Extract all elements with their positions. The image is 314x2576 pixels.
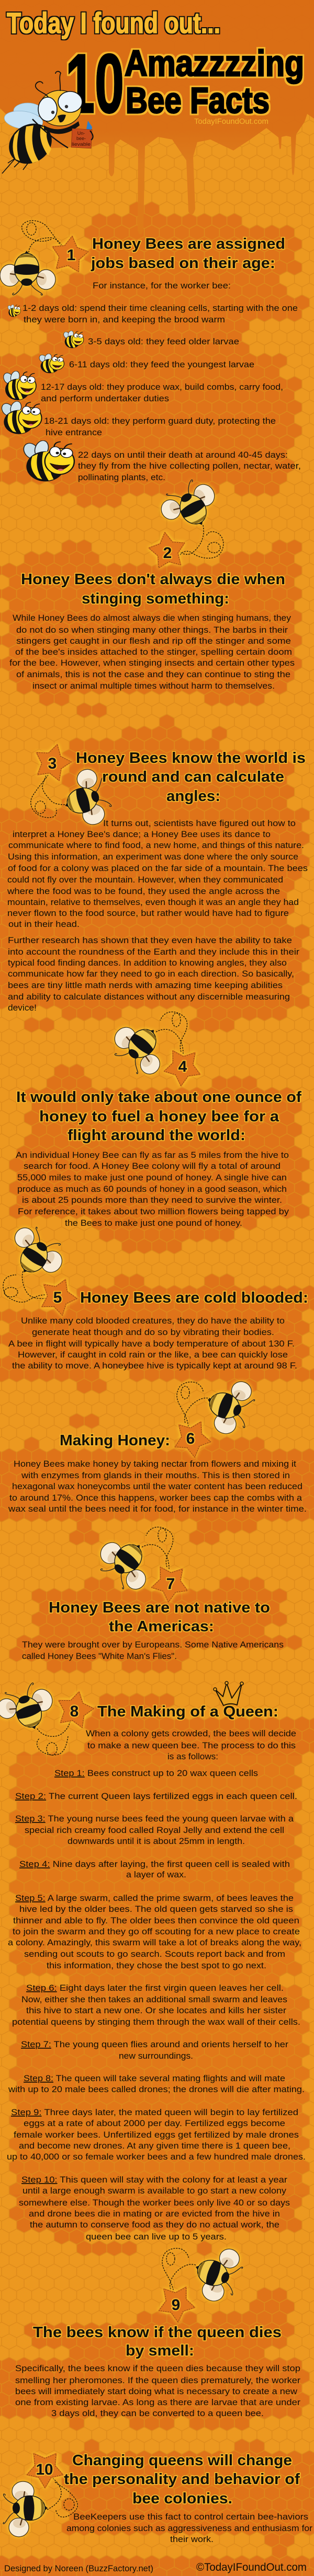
step 10: until a large enough swarm is available to go start a new colony bbox=[23, 2186, 287, 2196]
text block: fact 3 research: communicate how far they need to go in each direction. So basically, bbox=[8, 969, 294, 979]
step 8 bbox=[8, 2073, 305, 2094]
icon: star number 1 bbox=[50, 234, 90, 273]
panel: fact 1 assigned jobs bbox=[0, 221, 301, 482]
text block: fact 6: to around 17%. Once this happens, worker bees cap the combs with a bbox=[9, 1493, 302, 1503]
step 7 bbox=[21, 2039, 288, 2061]
step 5: thinner and able to fly. The older bees then convince the old queen bbox=[13, 1916, 299, 1925]
title: Today I found out: Today I found out... bbox=[7, 6, 220, 39]
panel: fact 8 making of a queen bbox=[0, 1678, 306, 2242]
icon: star number 8 bbox=[58, 1691, 95, 1730]
heading: fact 4: honey to fuel a honey bee for a bbox=[39, 1108, 279, 1125]
text block: fact 8 intro: is as follows: bbox=[167, 1751, 218, 1761]
icon: crown bbox=[214, 1681, 243, 1705]
step 7: new surroundings. bbox=[119, 2051, 193, 2061]
text block: fact 9: 3 days old, they can be converted to a queen bee. bbox=[51, 2408, 264, 2418]
step 10 bbox=[19, 2175, 290, 2242]
text block: fact 4 bbox=[16, 1150, 289, 1228]
text block: fact 9: one from existing larvae. As long as there are larvae that are under bbox=[15, 2397, 300, 2407]
text block: fact 3 dance: mountain, relative to themselves, even though it was an angle they had bbox=[7, 897, 299, 907]
heading: fact 7: Honey Bees are not native to bbox=[49, 1599, 270, 1616]
heading: fact 9: The bees know if the queen dies bbox=[33, 2324, 282, 2341]
heading: fact 10: bee colonies. bbox=[132, 2490, 232, 2507]
text block: fact 9: smelling her pheromones. If the queen dies prematurely, the worker bbox=[15, 2375, 300, 2385]
heading: fact 3: Honey Bees know the world is bbox=[76, 750, 306, 767]
text block: fact 7: called Honey Bees "White Man's Flies". bbox=[22, 1651, 177, 1661]
icon: star number 10: 10 bbox=[36, 2461, 53, 2478]
text block: fact 5: However, if caught in cold rain or the like, a bee can quickly lose bbox=[18, 1350, 288, 1360]
text block: fact 2: of animals, this is not the case and they can continue to sting the bbox=[16, 669, 290, 679]
text block: fact 8 intro: to make a new queen bee. The process to do this bbox=[87, 1740, 296, 1750]
text block: fact 2: do not do so when stinging many other things. The barbs in their bbox=[16, 625, 288, 635]
icon: star number 4: 4 bbox=[178, 1058, 187, 1075]
text: 6-11 days: 6-11 days old: they feed the youngest larvae bbox=[69, 359, 254, 369]
text block: fact 2: stingers get caught in our flesh and rip off the stinger and some bbox=[16, 636, 291, 646]
step 4 bbox=[19, 1859, 290, 1879]
text: 22 days on bbox=[78, 450, 301, 482]
step 4: a layer of wax. bbox=[126, 1870, 186, 1879]
icon: star number 2: 2 bbox=[163, 544, 172, 562]
footer copyright: ©TodayIFoundOut.com bbox=[196, 2561, 307, 2573]
text: 22 days on: 22 days on until their death at around 40-45 days: bbox=[78, 450, 288, 460]
step 5: hive led by the older bees. The old queen gets starved so she is bbox=[19, 1904, 293, 1914]
step 6 bbox=[12, 1983, 300, 2027]
icon: star number 9: 9 bbox=[172, 2296, 180, 2314]
text: for the worker bee: For instance, for the worker bee: bbox=[93, 281, 231, 291]
step 10: the autumn to conserve food as they do no actual work, the bbox=[30, 2220, 279, 2230]
step 6: this hive to start a new one. Or she locates and kills her sister bbox=[26, 2005, 286, 2015]
panel: fact 7 not native bbox=[22, 1527, 284, 1661]
text: 18-21 days bbox=[44, 416, 276, 437]
icon: star number 9 bbox=[157, 2287, 196, 2324]
text block: fact 10 bbox=[66, 2512, 312, 2544]
panel: fact 10 changing queens bbox=[3, 2452, 312, 2544]
step 10: Step 10: This queen will stay with the colony for at least a year bbox=[21, 2175, 287, 2185]
step 9: and become new drones. At any given time there is 1 queen bee, bbox=[19, 2141, 290, 2151]
heading: fact 6: Making Honey: bbox=[60, 1432, 170, 1449]
heading: fact 5: Honey Bees are cold blooded: bbox=[80, 1290, 308, 1306]
step 9 bbox=[7, 2107, 306, 2162]
text block: fact 5 bbox=[8, 1316, 297, 1371]
panel: fact 3 round world and angles bbox=[7, 740, 308, 1013]
text block: fact 3 research: into account the roundness of the Earth and they include this in their bbox=[8, 947, 299, 957]
footer credit: Designed by Noreen (BuzzFactory.net) bbox=[4, 2563, 153, 2573]
text block: fact 3 dance: never flown to the food source, but rather would have had to figure bbox=[7, 908, 289, 918]
heading: fact 2: Honey Bees don't always die when bbox=[21, 571, 285, 588]
icon: star number 5: 5 bbox=[53, 1289, 62, 1306]
icon: bee 18-21 days bbox=[0, 401, 42, 434]
text block: fact 10: among colonies such as aggressiveness and enthusiasm for bbox=[66, 2523, 312, 2533]
text block: fact 4: produce as much as 60 pounds of honey in a good season, which bbox=[17, 1184, 287, 1194]
text block: fact 6: with enzymes from glands in their mouths. This is then stored in bbox=[21, 1470, 290, 1480]
text block: fact 10: their work. bbox=[170, 2534, 214, 2544]
step 6: potential queens by stinging them through the wax wall of their cells. bbox=[12, 2017, 300, 2027]
panel: fact 9 smell bbox=[15, 2240, 300, 2418]
text block: fact 3 research: bees are tiny little math nerds with amazing time keeping abilities bbox=[8, 980, 283, 990]
icon: bee 12-17 days bbox=[2, 370, 36, 400]
heading: fact 9 bbox=[33, 2324, 282, 2359]
text block: fact 3 research: device! bbox=[8, 1003, 37, 1013]
text block: fact 3 dance: interpret a Honey Bee's dance; a Honey Bee uses its dance to bbox=[13, 829, 271, 839]
step 9: eggs at a rate of about 2000 per day. Fertilized eggs become bbox=[24, 2118, 285, 2128]
icon: star number 2 bbox=[147, 530, 187, 569]
heading: fact 8: The Making of a Queen: bbox=[97, 1703, 278, 1720]
panel: fact 4 ounce of honey bbox=[16, 1012, 301, 1228]
icon: bee 8 with trail bbox=[0, 1678, 70, 1755]
text block: fact 3 research: and ability to calculate distances without any discernible measuring bbox=[8, 992, 290, 1002]
step 5: a colony. Amazingly, this swarm will take a lot of breaks along the way, bbox=[8, 1937, 301, 1947]
text block: fact 8 intro: When a colony gets crowded, the bees will decide bbox=[86, 1728, 296, 1738]
text block: fact 5: the ability to move. A honeybee hive is typically kept at around 98 F. bbox=[12, 1361, 297, 1371]
step 9: Step 9: Three days later, the mated queen will begin to lay fertilized bbox=[11, 2107, 298, 2117]
text: 18-21 days: 18-21 days old: they perform guard duty, protecting the bbox=[44, 416, 276, 426]
text block: fact 3 dance: where the food was to be found, they used the angle across the bbox=[7, 886, 280, 896]
icon: star number 7: 7 bbox=[166, 1575, 175, 1593]
step 5: this information, they chose the best spot to go next. bbox=[47, 1960, 266, 1970]
text block: fact 6: Honey Bees make honey by taking nectar from flowers and mixing it bbox=[14, 1459, 296, 1469]
text block: fact 5: A bee in flight will typically have a body temperature of about 130 F. bbox=[8, 1339, 295, 1349]
step 9: female worker bees. Unfertilized eggs get fertilized by male drones bbox=[14, 2130, 299, 2140]
text block: fact 6: wax seal until the bees need it for food, for instance in the winter time. bbox=[8, 1504, 307, 1514]
text block: fact 2: While Honey Bees do almost always die when stinging humans, they bbox=[13, 613, 291, 623]
step 5: to join the swarm and they go off scouting for a new place to create bbox=[13, 1927, 300, 1936]
text block: fact 3 dance bbox=[7, 818, 308, 929]
heading: fact 7 bbox=[49, 1599, 270, 1635]
text: 1-2 days: 1-2 days old: spend their time cleaning cells, starting with the one bbox=[23, 303, 298, 313]
text: 12-17 days: and perform undertaker duties bbox=[41, 393, 169, 403]
text block: fact 2: of the bee's insides attached to the stinger, spelling certain doom bbox=[15, 647, 292, 657]
icon: bee 7 with trail bbox=[91, 1527, 173, 1597]
icon: bee 6 with trail bbox=[177, 1373, 260, 1440]
text block: fact 3 dance: Using this information, an experiment was done where the only source bbox=[8, 852, 298, 862]
icon: bee 1 with trail bbox=[0, 221, 63, 295]
text block: fact 3 dance: could not fly over the mountain. However, when they communicated bbox=[7, 875, 283, 885]
heading: fact 7: the Americas: bbox=[109, 1618, 214, 1635]
icon: bee 9 with trail bbox=[162, 2240, 248, 2307]
heading: fact 1: jobs based on their age: bbox=[91, 255, 275, 272]
text block: fact 4: For reference, it takes about two million flowers being tapped by bbox=[18, 1206, 289, 1216]
text block: fact 5: generate heat though and do so by vibrating their bodies. bbox=[32, 1327, 274, 1337]
icon: bee 4 with trail bbox=[105, 1012, 187, 1082]
step 3 bbox=[15, 1814, 294, 1846]
icon: bee 3 with trail bbox=[31, 765, 116, 831]
text: 22 days on: pollinating plants, etc. bbox=[78, 472, 165, 482]
text block: fact 3 research bbox=[8, 935, 299, 1013]
icon: header bee reading book: bee- bbox=[76, 136, 86, 141]
text block: fact 2: for the bee. However, when stinging insects and certain other types bbox=[9, 658, 295, 668]
title: 10 Amazzzzing Bee Facts: Bee Facts bbox=[126, 80, 270, 121]
text block: fact 3 dance: communicate where to find food, a new home, and things of this nature. bbox=[8, 840, 304, 850]
step 5: sending out scouts to go search. Scouts report back and from bbox=[24, 1949, 285, 1959]
icon: star number 3 bbox=[31, 740, 74, 782]
icon: header bee reading book: lievable bbox=[72, 142, 91, 147]
text block: fact 8 intro bbox=[86, 1728, 296, 1761]
text block: fact 4: 55,000 miles to make just one pound of honey. A single hive can bbox=[17, 1173, 287, 1182]
step 5 bbox=[8, 1893, 301, 1970]
step 2: Step 2: The current Queen lays fertilized eggs in each queen cell. bbox=[15, 1791, 297, 1801]
step 5: Step 5: A large swarm, called the prime swarm, of bees leaves the bbox=[15, 1893, 294, 1903]
heading: fact 3 bbox=[76, 750, 306, 805]
heading: fact 10 bbox=[64, 2452, 300, 2507]
heading: fact 2 bbox=[21, 571, 285, 607]
icon: star number 7 bbox=[151, 1567, 189, 1604]
step 3: Step 3: The young nurse bees feed the young queen larvae with a bbox=[15, 1814, 294, 1824]
title: 10 Amazzzzing Bee Facts: 10 bbox=[65, 37, 124, 130]
panel: fact 2 stinging bbox=[9, 473, 295, 691]
icon: small bee 6-11 days bbox=[38, 353, 64, 373]
step 10: queen bee can live up to 5 years. bbox=[86, 2232, 227, 2242]
step 9: up to 40,000 or so female worker bees and a few hundred male drones. bbox=[7, 2152, 306, 2162]
step 3: downwards until it is about 25mm in length. bbox=[68, 1836, 245, 1846]
icon: star number 6: 6 bbox=[186, 1430, 195, 1447]
honey drip header bbox=[0, 0, 314, 235]
text block: fact 4: the Bees to make just one pound of honey. bbox=[65, 1218, 242, 1228]
icon: bee 2 with trail bbox=[155, 473, 225, 558]
icon: bee 10 with trail bbox=[3, 2478, 77, 2537]
text: 12-17 days: 12-17 days old: they produce wax, build combs, carry food, bbox=[41, 382, 283, 392]
text block: fact 4: is about 25 pounds more than they need to survive the winter. bbox=[22, 1195, 282, 1205]
icon: star number 10 bbox=[27, 2454, 63, 2488]
text block: fact 10: BeeKeepers use this fact to control certain bee-haviors bbox=[73, 2512, 308, 2522]
text: 1-2 days: they were born in, and keeping the brood warm bbox=[24, 315, 225, 324]
text block: fact 3 dance: It turns out, scientists have figured out how to bbox=[103, 818, 296, 828]
step 1: Step 1: Bees construct up to 20 wax queen cells bbox=[54, 1768, 258, 1778]
text block: fact 2 bbox=[9, 613, 295, 691]
heading: fact 1: Honey Bees are assigned bbox=[92, 236, 285, 252]
icon: small bee 3-5 days bbox=[63, 330, 84, 348]
heading: fact 3: round and can calculate bbox=[102, 769, 284, 785]
text: 18-21 days: hive entrance bbox=[46, 427, 102, 437]
step 4: Step 4: Nine days after laying, the first queen cell is sealed with bbox=[19, 1859, 290, 1869]
icon: header bee reading book: Un- bbox=[77, 131, 85, 136]
heading: fact 10: the personality and behavior of bbox=[64, 2471, 300, 2488]
text: 22 days on: they fly from the hive collecting pollen, nectar, water, bbox=[78, 461, 301, 471]
step 3: special rich creamy food called Royal Jelly and extend the cell bbox=[25, 1825, 284, 1835]
text block: fact 9: Specifically, the bees know if the queen dies because they will stop bbox=[15, 2363, 300, 2373]
heading: fact 1 bbox=[91, 236, 285, 272]
text: 3-5 days: 3-5 days old: they feed older larvae bbox=[88, 336, 239, 346]
step 6: Now, either she then takes an additional small swarm and leaves bbox=[21, 1994, 287, 2004]
icon: star number 5 bbox=[41, 1278, 78, 1316]
heading: fact 3: angles: bbox=[166, 788, 220, 805]
icon: small bee 1-2 days bbox=[7, 305, 20, 317]
heading: fact 4: It would only take about one ounce of bbox=[16, 1089, 301, 1106]
heading: fact 2: stinging something: bbox=[82, 590, 229, 607]
heading: fact 9: by smell: bbox=[126, 2342, 194, 2359]
text block: fact 5: Unlike many cold blooded creatures, they do have the ability to bbox=[21, 1316, 285, 1326]
heading: fact 4: flight around the world: bbox=[68, 1127, 245, 1144]
icon: star number 8: 8 bbox=[70, 1703, 78, 1720]
text block: fact 7 bbox=[22, 1640, 284, 1661]
text block: fact 6: hexagonal wax honeycombs until the water content has been reduced bbox=[12, 1481, 302, 1491]
icon: bee 22 days on bbox=[21, 439, 74, 481]
text block: fact 6 bbox=[8, 1459, 307, 1514]
text block: fact 2: insect or animal multiple times without harm to themselves. bbox=[32, 681, 275, 691]
text: 1-2 days bbox=[23, 303, 298, 324]
step 8: Step 8: The queen will take several mating flights and will mate bbox=[24, 2073, 285, 2083]
step 6: Step 6: Eight days later the first virgin queen leaves her cell. bbox=[26, 1983, 284, 1993]
text block: fact 4: An individual Honey Bee can fly as far as 5 miles from the hive to bbox=[16, 1150, 289, 1160]
site url: TodayIFoundOut.com bbox=[194, 117, 268, 126]
icon: header bee reading book bbox=[1, 72, 93, 173]
step 7: Step 7: The young queen flies around and orients herself to her bbox=[21, 2039, 288, 2049]
icon: star number 1: 1 bbox=[67, 247, 75, 264]
heading: fact 4 bbox=[16, 1089, 301, 1144]
icon: bee 5 with trail bbox=[0, 1220, 71, 1302]
icon: star number 4 bbox=[163, 1050, 202, 1087]
text block: fact 3 research: Further research has shown that they even have the ability to take bbox=[8, 935, 292, 945]
panel: fact 5 cold blooded bbox=[0, 1220, 308, 1371]
panel: fact 6 making honey bbox=[8, 1373, 307, 1514]
text block: fact 3 research: typical food finding dances. In addition to knowing angles, they also bbox=[8, 958, 287, 968]
text: 12-17 days bbox=[41, 382, 283, 403]
text block: fact 7: They were brought over by Europeans. Some Native Americans bbox=[22, 1640, 284, 1650]
step 10: somewhere else. Though the worker bees only live 40 or so days bbox=[19, 2198, 290, 2208]
text block: fact 4: search for food. A Honey Bee colony will fly a total of around bbox=[24, 1161, 281, 1171]
title: 10 Amazzzzing Bee Facts bbox=[65, 37, 304, 130]
step 8: with up to 20 male bees called drones; the drones will die after mating. bbox=[8, 2084, 305, 2094]
text block: fact 3 dance: of food for a colony was placed on the far side of a mountain. The bees bbox=[8, 863, 308, 873]
text block: fact 3 dance: out in their head. bbox=[8, 919, 80, 929]
icon: star number 6 bbox=[174, 1418, 214, 1459]
icon: star number 3: 3 bbox=[48, 755, 57, 772]
text block: fact 9 bbox=[15, 2363, 300, 2418]
heading: fact 10: Changing queens will change bbox=[72, 2452, 292, 2469]
step 10: and drone bees die in mating or are evicted from the hive in bbox=[29, 2209, 280, 2219]
text block: fact 9: bees will immediately start doing what is necessary to create a new bbox=[15, 2386, 298, 2396]
